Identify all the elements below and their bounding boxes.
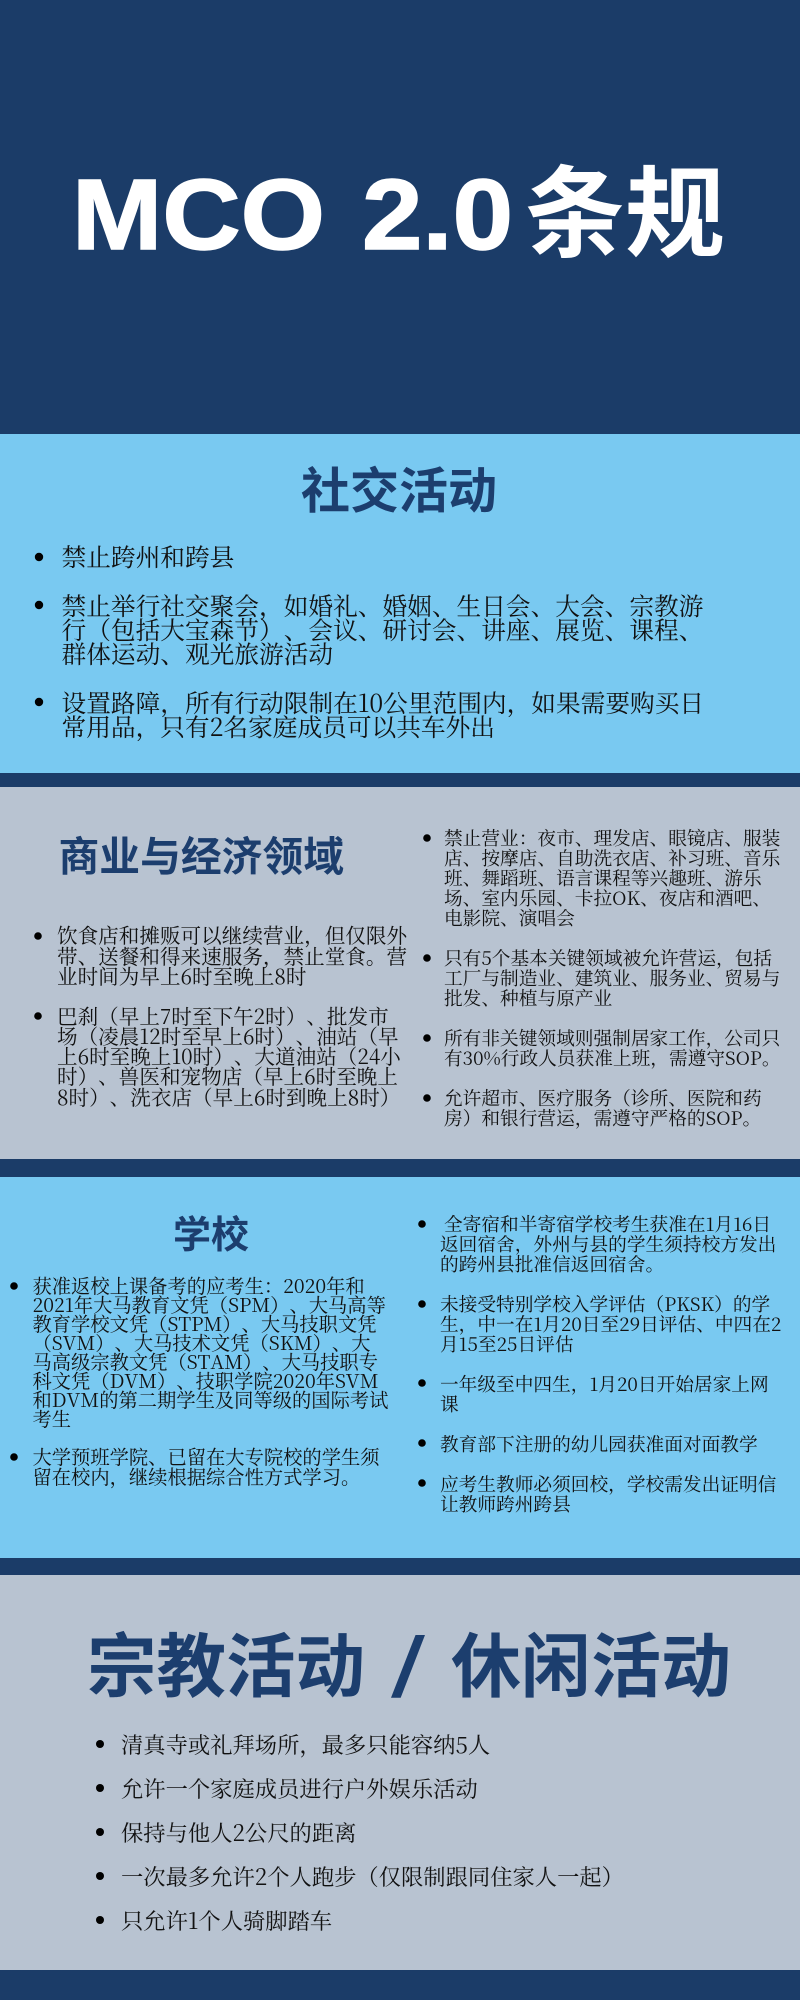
bullet: exam candidates: （SVM）、大马技术文凭（SKM）、大 xyxy=(32,1328,370,1356)
bullet: opening hours xyxy=(34,1000,401,1111)
bullet: online classes: 课 xyxy=(440,1390,459,1417)
bullet: five key sectors xyxy=(423,944,780,1011)
title: MCO xyxy=(72,159,325,271)
heading: business and economy: 商业与经济领域 xyxy=(58,834,344,880)
bullet: teachers: 应考生教师必须回校，学校需发出证明信 xyxy=(440,1470,777,1497)
bullet: opening hours: 时）、兽医和宠物店（早上6时至晚上 xyxy=(57,1060,398,1090)
bullet: mosques: 清真寺或礼拜场所，最多只能容纳5人 xyxy=(121,1728,490,1760)
divider band xyxy=(0,773,800,787)
bullet: work from home xyxy=(423,1024,781,1071)
bullet: work from home: 所有非关键领域则强制居家工作，公司只 xyxy=(444,1024,781,1051)
title: 2.0 xyxy=(362,159,513,271)
bullet: five key sectors: 只有5个基本关键领域被允许营运，包括 xyxy=(444,944,772,971)
bullet: PKSK assessment xyxy=(418,1290,781,1357)
bullet: pre-university students: 大学预班学院、已留在大专院校的学生须 xyxy=(32,1442,380,1470)
bullet: exam candidates: 和DVM的第二期学生及同等级的国际考试 xyxy=(32,1385,388,1413)
bullet: exam candidates: 2021年大马教育文凭（SPM）、大马高等 xyxy=(32,1290,386,1318)
bullet: no social gatherings: 禁止举行社交聚会，如婚礼、婚姻、生日会、大会、宗教游 xyxy=(62,588,703,623)
bullet: no social gatherings: 群体运动、观光旅游活动 xyxy=(62,636,333,671)
bullet: banned businesses: 电影院、演唱会 xyxy=(444,904,575,931)
divider band xyxy=(0,1558,800,1575)
bullet: banned businesses xyxy=(423,824,781,931)
heading: religious and leisure activities: 休闲活动 xyxy=(451,1628,731,1706)
bullet: teachers: 让教师跨州跨县 xyxy=(440,1490,571,1517)
heading: religious and leisure activities: 宗教活动 xyxy=(87,1628,365,1706)
bullet: PKSK assessment: 未接受特别学校入学评估（PKSK）的学 xyxy=(440,1290,771,1317)
bullet: online classes: 一年级至中四生，1月20日开始居家上网 xyxy=(440,1370,769,1397)
bullet: opening hours: 8时）、洗衣店（早上6时到晚上8时） xyxy=(57,1081,400,1111)
bullet: roadblocks and 10km limit: 设置路障，所有行动限制在10公里范围内，如果需要购买日 xyxy=(62,685,704,720)
bullet: exam candidates: 获准返校上课备考的应考生：2020年和 xyxy=(32,1271,365,1299)
title: 条规 xyxy=(525,159,725,271)
bullet: supermarkets and banks: 允许超市、医疗服务（诊所、医院和药 xyxy=(444,1084,762,1111)
footer band xyxy=(0,1970,800,2000)
heading: religious and leisure activities xyxy=(87,1621,731,1716)
bullet: no social gatherings: 行（包括大宝森节）、会议、研讨会、讲座、展览、课程、 xyxy=(62,612,703,647)
bullet: pre-university students xyxy=(10,1442,380,1490)
bullet: exam candidates: 教育学校文凭（STPM）、大马技职文凭 xyxy=(32,1309,377,1337)
bullet: roadblocks and 10km limit xyxy=(35,685,704,744)
title xyxy=(72,159,725,271)
bullet: no social gatherings xyxy=(35,588,703,671)
bullet: boarding students xyxy=(418,1210,776,1277)
bullet: opening hours: 上6时至晚上10时）、大道油站（24小 xyxy=(57,1040,401,1070)
bullet: exam candidates: 马高级宗教文凭（STAM）、大马技职专 xyxy=(32,1347,378,1375)
heading: schools: 学校 xyxy=(173,1215,249,1257)
bullet: exam candidates: 考生 xyxy=(32,1404,71,1432)
bullet: supermarkets and banks: 房）和银行营运，需遵守严格的SOP。 xyxy=(444,1104,761,1131)
bullet: outdoor recreation: 允许一个家庭成员进行户外娱乐活动 xyxy=(121,1772,478,1804)
bullet: no interstate travel: 禁止跨州和跨县 xyxy=(62,539,234,574)
panel: business and economy xyxy=(0,787,800,1159)
panel: title banner xyxy=(0,0,800,434)
panel: social activities xyxy=(0,434,800,773)
bullet: jogging: 一次最多允许2个人跑步（仅限制跟同住家人一起） xyxy=(121,1860,624,1892)
bullet: kindergartens: 教育部下注册的幼儿园获准面对面教学 xyxy=(440,1430,758,1457)
heading: religious and leisure activities: / xyxy=(391,1621,426,1716)
bullet: restaurants xyxy=(34,919,408,990)
heading: social activities: 社交活动 xyxy=(301,465,497,519)
bullet: five key sectors: 批发、种植与原产业 xyxy=(444,984,612,1011)
panel: schools xyxy=(0,1177,800,1558)
bullet: PKSK assessment: 月15至25日评估 xyxy=(440,1330,574,1357)
divider band xyxy=(0,1159,800,1177)
bullet: PKSK assessment: 生，中一在1月20日至29日评估、中四在2 xyxy=(440,1310,781,1337)
bullet: distance: 保持与他人2公尺的距离 xyxy=(121,1816,356,1848)
bullet: boarding students: 全寄宿和半寄宿学校考生获准在1月16日 xyxy=(444,1210,771,1237)
bullet: roadblocks and 10km limit: 常用品，只有2名家庭成员可以共车外出 xyxy=(62,709,495,744)
bullet: restaurants: 业时间为早上6时至晚上8时 xyxy=(57,960,307,990)
bullet: online classes xyxy=(418,1370,769,1417)
bullet: exam candidates xyxy=(10,1271,388,1432)
bullet: cycling: 只允许1个人骑脚踏车 xyxy=(121,1904,332,1936)
bullet: work from home: 有30%行政人员获准上班，需遵守SOP。 xyxy=(444,1044,781,1071)
bullet: opening hours: 巴刹（早上7时至下午2时）、批发市 xyxy=(57,1000,389,1030)
bullet: five key sectors: 工厂与制造业、建筑业、服务业、贸易与 xyxy=(444,964,780,991)
bullet: banned businesses: 场、室内乐园、卡拉OK、夜店和酒吧、 xyxy=(444,884,771,911)
panel: religious and leisure activities xyxy=(0,1575,800,1970)
bullet: opening hours: 场（凌晨12时至早上6时）、油站（早 xyxy=(57,1020,399,1050)
bullet: boarding students: 的跨州县批准信返回宿舍。 xyxy=(440,1250,664,1277)
bullet: exam candidates: 科文凭（DVM）、技职学院2020年SVM xyxy=(32,1366,379,1394)
bullet: banned businesses: 店、按摩店、自助洗衣店、补习班、音乐 xyxy=(444,844,781,871)
bullet: banned businesses: 班、舞蹈班、语言课程等兴趣班、游乐 xyxy=(444,864,762,891)
bullet: supermarkets and banks xyxy=(423,1084,762,1131)
bullet: boarding students: 返回宿舍，外州与县的学生须持校方发出 xyxy=(440,1230,776,1257)
bullet: restaurants: 饮食店和摊贩可以继续营业，但仅限外 xyxy=(57,919,408,949)
bullet: restaurants: 带、送餐和得来速服务，禁止堂食。营 xyxy=(57,940,407,970)
bullet: banned businesses: 禁止营业：夜市、理发店、眼镜店、服装 xyxy=(444,824,781,851)
bullet: pre-university students: 留在校内，继续根据综合性方式学习。 xyxy=(32,1462,360,1490)
bullet: teachers xyxy=(418,1470,777,1517)
